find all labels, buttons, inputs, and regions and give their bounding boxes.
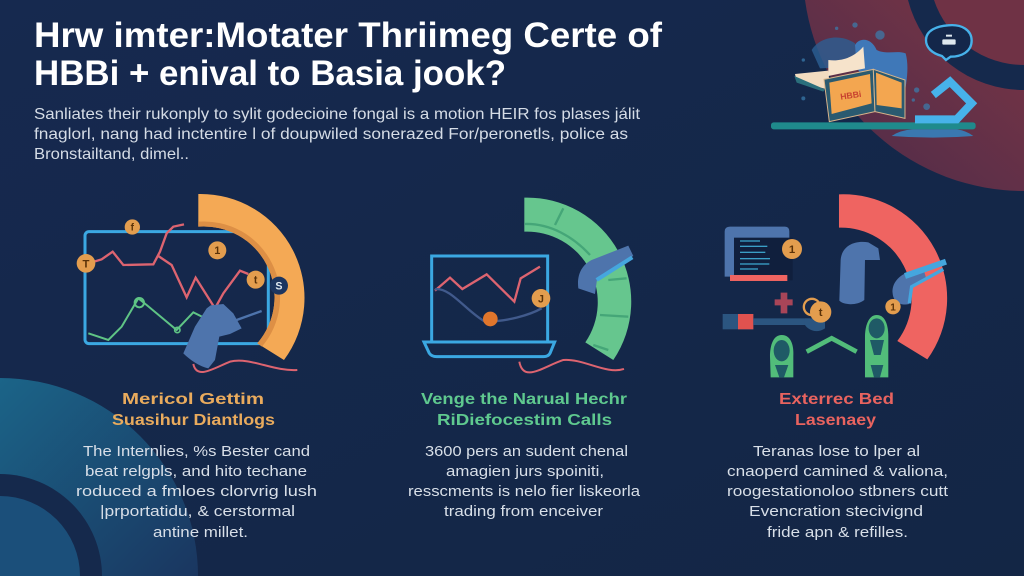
coin (77, 254, 95, 273)
title: Hrw imter:Motater Thriimeg Certe of (34, 16, 662, 55)
body: fride apn & refilles. (767, 524, 908, 541)
laptop (424, 256, 555, 357)
card text: left (76, 391, 317, 541)
squiggle (519, 360, 624, 372)
terminal window (725, 227, 793, 281)
coin (532, 289, 550, 308)
coin: t (254, 274, 258, 286)
blue splash behind book (801, 22, 930, 110)
body (76, 443, 317, 541)
heading: Suasihur Diantlogs (112, 412, 275, 429)
hand (183, 304, 242, 368)
heading (112, 391, 275, 429)
illustration: green gauge laptop (424, 198, 633, 372)
coin (247, 271, 265, 289)
body: cnaoperd camined & valiona, (727, 463, 948, 480)
body: resscments is nelo fier liskeorla (408, 483, 641, 500)
orange ball (483, 312, 498, 326)
coins stack: t (819, 307, 823, 319)
body (727, 443, 949, 541)
shelf base (892, 129, 973, 138)
book: HBBi (840, 89, 862, 102)
illustration: orange gauge chart (77, 194, 304, 372)
body: antine millet. (153, 524, 248, 541)
coin (885, 299, 901, 314)
body: Teranas lose to lper al (753, 443, 920, 460)
body: trading from enceiver (444, 503, 603, 520)
robot arm (915, 82, 972, 119)
heading: RiDiefocestim Calls (437, 412, 612, 429)
intro text: Bronstailtand, dimel.. (34, 146, 189, 163)
coin (125, 219, 140, 235)
badge: S (275, 281, 283, 293)
heading: Lasenaey (795, 412, 876, 429)
coin: f (131, 223, 135, 234)
heading: Mericol Gettim (122, 391, 264, 408)
intro text: fnaglorl, nang had inctentire l of doupwiled sonerazed For/peronetls, police as (34, 126, 628, 143)
illustration: red gauge terminal (723, 194, 947, 377)
pointer (237, 311, 262, 320)
body: Evencration stecivignd (749, 503, 923, 520)
intro text: Sanliates their rukonply to sylit godecioine fongal is a motion HEIR fos plases jálit (34, 106, 641, 123)
background circles: bottom left (0, 378, 198, 576)
heading: Venge the Narual Hechr (421, 391, 627, 408)
body: beat relgpls, and hito techane (85, 463, 307, 480)
blue clip (893, 262, 946, 304)
blue clip (578, 246, 633, 294)
body: 3600 pers an sudent chenal (425, 443, 628, 460)
coin (782, 239, 802, 259)
speech bubble (926, 25, 972, 60)
coin: J (538, 293, 544, 305)
body: roogestationoloo stbners cutt (727, 483, 949, 500)
green arc (524, 198, 631, 360)
red arc (839, 194, 947, 359)
book (794, 47, 905, 122)
background circles: top right (805, 0, 1024, 191)
body: roduced a fmloes clorvrig lush (76, 483, 317, 500)
red line (435, 267, 540, 302)
shelf (771, 122, 976, 129)
coin: T (83, 258, 90, 270)
coin: 1 (890, 302, 896, 313)
coins stack (803, 298, 831, 323)
coin (208, 241, 226, 259)
plus sign (775, 293, 793, 313)
red line (88, 224, 184, 265)
body: The Internlies, %s Bester cand (83, 443, 310, 460)
body: |prportatidu, & cerstormal (100, 503, 295, 520)
body (408, 443, 641, 520)
title (34, 16, 662, 93)
screen frame (85, 232, 268, 344)
green line (88, 298, 207, 340)
navy line (435, 289, 542, 322)
body: amagien jurs spoiniti, (446, 463, 604, 480)
title: HBBi + enival to Basia jook? (34, 54, 506, 93)
squiggle (193, 361, 297, 372)
hero illustration: open book on shelf (771, 22, 976, 138)
badge (270, 277, 288, 295)
heading (779, 391, 894, 429)
coin: 1 (214, 245, 220, 257)
card text: right (727, 391, 949, 541)
coin: 1 (789, 244, 795, 256)
green chevron (807, 338, 857, 352)
connector (723, 314, 825, 331)
heading (421, 391, 627, 429)
orange arc (198, 194, 304, 360)
card text: middle (408, 391, 641, 520)
intro text (34, 106, 641, 163)
hand (839, 242, 880, 304)
green figure right (865, 315, 888, 377)
heading: Exterrec Bed (779, 391, 894, 408)
green figure left (770, 335, 793, 377)
